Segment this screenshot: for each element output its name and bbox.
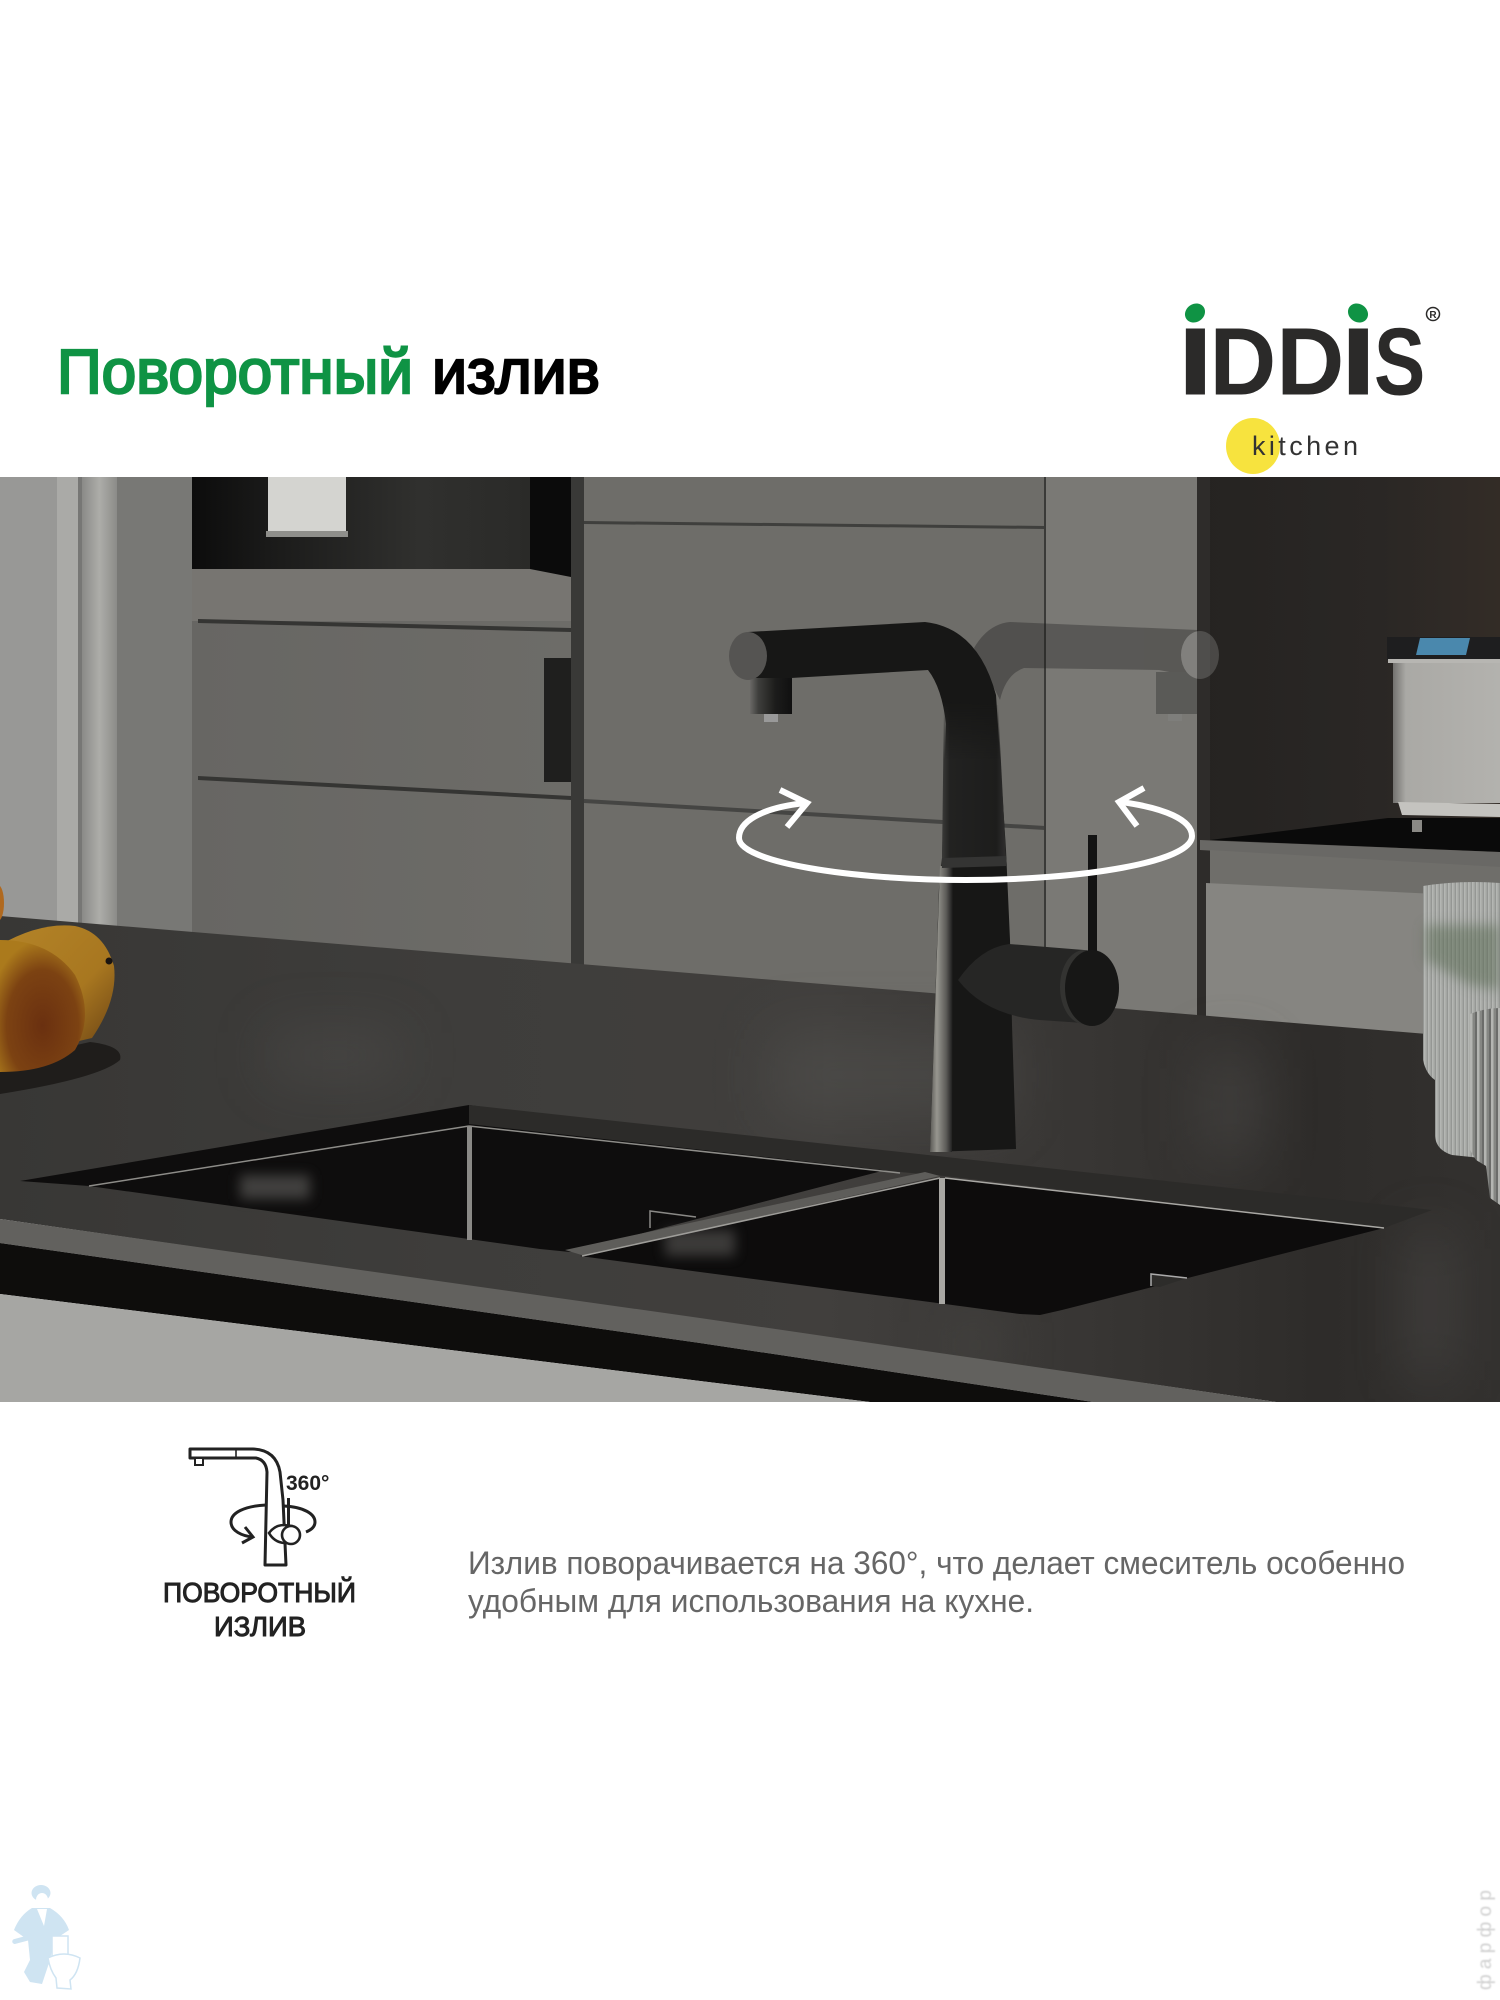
appliance on shelf [1387,637,1500,832]
icon caption: ИЗЛИВ [214,1611,306,1642]
watermark: plumber with toilet [12,1885,80,1989]
faucet spout end [729,632,767,680]
logo yellow dot [1226,418,1280,474]
tall glass [1423,882,1500,1160]
logo wordmark: S [1374,308,1425,415]
description text [468,1545,1405,1619]
logo wordmark [1177,300,1440,416]
photo: kitchen with faucet [0,477,1500,1402]
rotation arrow [739,788,1192,880]
countertop [0,916,1500,1402]
shelf shadow [1210,818,1500,852]
faucet aerator [750,678,792,722]
divider between sinks [565,1172,940,1256]
plumber figure [12,1885,69,1984]
toilet [48,1936,80,1989]
fruit bowl [0,885,120,1094]
title: Поворотный [57,338,413,407]
plumber face and shirt [36,1893,48,1926]
ribbed glasses [1423,882,1500,1205]
logo: IDDIS kitchen [1177,300,1440,474]
countertop reflections [270,1030,1450,1380]
dark column and shelf [1197,477,1500,1080]
title [57,338,600,407]
description text: Излив поворачивается на 360°, что делает смеситель особенно [468,1545,1405,1581]
logo wordmark: I [1177,307,1214,415]
icon caption [163,1577,356,1642]
faucet collar [942,856,1007,868]
icon separator [235,1449,237,1458]
watermark: vertical site text: фарфор [1475,1890,1496,1990]
faucet [729,622,1119,1152]
faucet upper body shading [942,702,1006,858]
icon: swivel spout 360 [190,1449,329,1565]
faucet spout and body [748,622,1016,1152]
faucet lever [1088,835,1097,951]
kitchen background wall [0,477,1500,932]
logo wordmark: I [1340,307,1377,415]
front edge of counter [0,1219,1276,1402]
icon faucet outline [190,1449,286,1565]
logo wordmark: R [1429,310,1437,321]
left cabinet with niche [192,477,584,977]
icon rotation arrow [231,1505,315,1543]
faucet handle [958,944,1119,1026]
icon 360 degrees label: 360° [286,1472,329,1495]
ghost faucet position [974,622,1219,721]
icon caption: ПОВОРОТНЫЙ [163,1577,356,1608]
logo wordmark: D [1276,309,1344,416]
description text: удобным для использования на кухне. [468,1583,1034,1619]
left sink [20,1105,905,1252]
logo sub-brand: kitchen [1252,431,1358,461]
faucet metal highlight [930,866,953,1152]
right cabinet panels [584,477,1197,1037]
short glass [1470,1008,1500,1205]
icon aerator [195,1458,203,1465]
under-counter cabinet [0,1243,1093,1402]
icon handle [269,1525,300,1544]
logo wordmark: D [1210,308,1276,415]
stone back rim of sinks [469,1105,1222,1202]
lower cabinet panel [1206,883,1423,1034]
greenery behind glass [1425,925,1500,990]
shelf front band [1200,840,1500,857]
right sink [580,1178,1384,1315]
lower cabinet upper panel [1210,850,1322,857]
icon lever [287,1498,290,1528]
title: излив [432,338,600,407]
